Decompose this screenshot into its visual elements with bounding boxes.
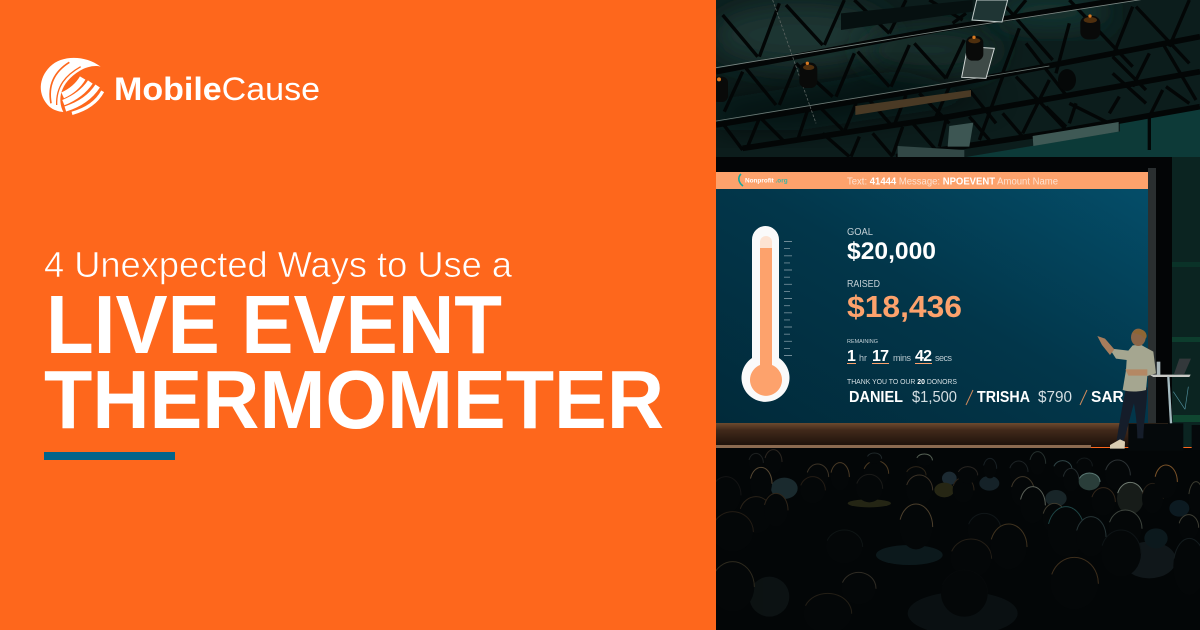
- remaining countdown: [847, 339, 952, 365]
- title: THERMOMETER: THERMOMETER: [44, 353, 664, 446]
- logo: MobileCause: [41, 58, 320, 113]
- remaining countdown: 42: [915, 348, 932, 365]
- right wall beside screen: [1172, 157, 1200, 447]
- screen background: [716, 172, 1148, 424]
- remaining countdown: secs: [935, 353, 952, 363]
- title: LIVE EVENT: LIVE EVENT: [46, 278, 502, 371]
- remaining countdown: REMAINING: [847, 339, 878, 345]
- icon: striped globe: [41, 58, 103, 113]
- screen keyword text: Text: 41444 Message: NPOEVENT Amount Name: [847, 176, 1058, 188]
- ceiling panels and lights: [712, 0, 1119, 157]
- thermometer ticks: [784, 242, 792, 356]
- remaining countdown: hr: [859, 353, 867, 363]
- icon: stage lamps: [712, 14, 1100, 102]
- panel: orange background: [0, 0, 716, 630]
- presenter: [1097, 329, 1156, 449]
- donor thank-you ticker: SARA: [1091, 389, 1135, 406]
- screen logo: Nonprofit .org: [745, 178, 788, 184]
- thermometer graphic: [742, 226, 792, 402]
- audience heads: [711, 450, 1200, 630]
- remaining countdown: 17: [872, 348, 889, 365]
- heading underline: [44, 452, 175, 460]
- donor thank-you ticker: $1,500: [912, 389, 957, 406]
- raised readout: RAISED: [847, 279, 880, 290]
- goal readout: GOAL: [847, 227, 873, 238]
- raised readout: $18,436: [847, 289, 962, 324]
- screen top bar: [716, 172, 1148, 189]
- donor thank-you ticker: THANK YOU TO OUR 20 DONORS: [847, 377, 957, 386]
- remaining countdown: 1: [847, 348, 856, 365]
- photo: keynote stage: [710, 0, 1200, 630]
- audience silhouettes: [711, 450, 1200, 630]
- table and laptop: [1149, 359, 1191, 423]
- audience clothing tones: [749, 472, 1189, 630]
- donor thank-you ticker: $790: [1038, 389, 1072, 406]
- heading line: 4 Unexpected Ways to Use a: 4 Unexpected Ways to Use a: [44, 244, 513, 285]
- donor thank-you ticker: DANIEL: [849, 389, 903, 406]
- donor thank-you ticker: [847, 379, 1124, 406]
- speaker and lectern: [1097, 329, 1200, 451]
- wordmark: MobileCause: [114, 71, 320, 107]
- ceiling wall: [716, 0, 1200, 157]
- goal readout: $20,000: [847, 238, 936, 265]
- screen logo: [739, 174, 788, 186]
- screen frame: [716, 157, 1172, 447]
- donor thank-you ticker: TRISHA: [977, 389, 1030, 406]
- goal readout: [847, 227, 936, 265]
- ceiling trusses: [716, 0, 1200, 157]
- stage front: [716, 423, 1168, 447]
- remaining countdown: mins: [893, 353, 912, 363]
